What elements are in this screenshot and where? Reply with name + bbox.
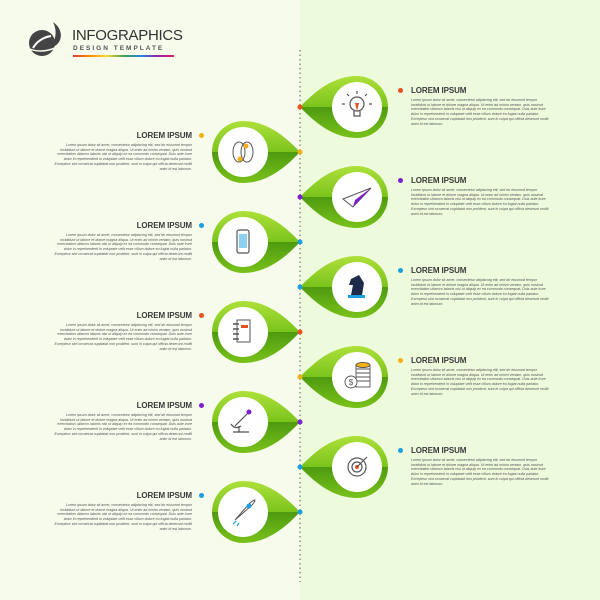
text R5: Lorem ipsum dolor sit amet, consectetur adipiscing elit, sed do eiusmod tempor incididunt ut labore et dolore magna aliqua. Ut enim ad minim veniam, quis nostrud exercitation ullamco laboris nisi ut aliquip ex ea commodo consequat. Duis aute irure dolor in reprehenderit in voluptate velit esse cillum dolore eu fugiat nulla pariatur. Excepteur sint occaecat cupidatat non proident, sunt in culpa qui officia deserunt mollit anim id est laborum. [411,458,548,486]
dot L1 [199,133,204,138]
pin R3 [298,256,388,318]
text R4 [411,356,549,396]
pin R4: $ [349,378,354,387]
text R4: LOREM IPSUM [411,356,466,365]
icon: target [348,458,366,476]
text R1: Lorem ipsum dolor sit amet, consectetur adipiscing elit, sed do eiusmod tempor incididunt ut labore et dolore magna aliqua. Ut enim ad minim veniam, quis nostrud exercitation ullamco laboris nisi ut aliquip ex ea commodo consequat. Duis aute irure dolor in reprehenderit in voluptate velit esse cillum dolore eu fugiat nulla pariatur. Excepteur sint occaecat cupidatat non proident, sunt in culpa qui officia deserunt mollit anim id est laborum. [411,98,548,126]
text L1: Lorem ipsum dolor sit amet, consectetur adipiscing elit, sed do eiusmod tempor incididunt ut labore et dolore magna aliqua. Ut enim ad minim veniam, quis nostrud exercitation ullamco laboris nisi ut aliquip ex ea commodo consequat. Duis aute irure dolor in reprehenderit in voluptate velit esse cillum dolore eu fugiat nulla pariatur. Excepteur sint occaecat cupidatat non proident, sunt in culpa qui officia deserunt mollit anim id est laborum. [55,143,192,171]
pin R5 [298,436,388,498]
icon: chess knight [349,275,364,295]
text L2 [54,221,192,261]
text R1: LOREM IPSUM [411,86,466,95]
text L4: Lorem ipsum dolor sit amet, consectetur adipiscing elit, sed do eiusmod tempor incididunt ut labore et dolore magna aliqua. Ut enim ad minim veniam, quis nostrud exercitation ullamco laboris nisi ut aliquip ex ea commodo consequat. Duis aute irure dolor in reprehenderit in voluptate velit esse cillum dolore eu fugiat nulla pariatur. Excepteur sint occaecat cupidatat non proident, sunt in culpa qui officia deserunt mollit anim id est laborum. [55,413,192,441]
icon: notebook [237,320,250,342]
dot R3 [398,268,403,273]
text R3: Lorem ipsum dolor sit amet, consectetur adipiscing elit, sed do eiusmod tempor incididunt ut labore et dolore magna aliqua. Ut enim ad minim veniam, quis nostrud exercitation ullamco laboris nisi ut aliquip ex ea commodo consequat. Duis aute irure dolor in reprehenderit in voluptate velit esse cillum dolore eu fugiat nulla pariatur. Excepteur sint occaecat cupidatat non proident, sunt in culpa qui officia deserunt mollit anim id est laborum. [411,278,548,306]
icon: microscope [231,412,249,432]
pin L1 [212,121,302,183]
icon: logo mark [29,22,61,56]
dot L3 [199,313,204,318]
icon: coins [345,362,370,388]
text L3 [54,311,192,351]
dot L5 [199,493,204,498]
text L2: Lorem ipsum dolor sit amet, consectetur adipiscing elit, sed do eiusmod tempor incididunt ut labore et dolore magna aliqua. Ut enim ad minim veniam, quis nostrud exercitation ullamco laboris nisi ut aliquip ex ea commodo consequat. Duis aute irure dolor in reprehenderit in voluptate velit esse cillum dolore eu fugiat nulla pariatur. Excepteur sint occaecat cupidatat non proident, sunt in culpa qui officia deserunt mollit anim id est laborum. [55,233,192,261]
dot L4 [199,403,204,408]
icon: bulb [342,91,372,116]
pin R1 [298,76,388,138]
logo [29,22,183,57]
text L1 [54,131,192,171]
dot R1 [398,88,403,93]
text L3: LOREM IPSUM [137,311,192,320]
dot L2 [199,223,204,228]
text R2 [411,176,549,216]
text L5 [54,491,192,531]
text L2: LOREM IPSUM [137,221,192,230]
text L4 [54,401,192,441]
logo text: INFOGRAPHICS [72,27,183,44]
icon: rocket [235,500,255,520]
pin L3 [212,301,302,363]
text R5 [411,446,549,486]
icon: brain [233,142,253,162]
text R5: LOREM IPSUM [411,446,466,455]
text R4: Lorem ipsum dolor sit amet, consectetur adipiscing elit, sed do eiusmod tempor incididunt ut labore et dolore magna aliqua. Ut enim ad minim veniam, quis nostrud exercitation ullamco laboris nisi ut aliquip ex ea commodo consequat. Duis aute irure dolor in reprehenderit in voluptate velit esse cillum dolore eu fugiat nulla pariatur. Excepteur sint occaecat cupidatat non proident, sunt in culpa qui officia deserunt mollit anim id est laborum. [411,368,548,396]
pin L4 [212,391,302,453]
text L5: LOREM IPSUM [137,491,192,500]
pin L5 [212,481,302,543]
pin L2 [212,211,302,273]
icon: phone [237,230,249,253]
text L3: Lorem ipsum dolor sit amet, consectetur adipiscing elit, sed do eiusmod tempor incididunt ut labore et dolore magna aliqua. Ut enim ad minim veniam, quis nostrud exercitation ullamco laboris nisi ut aliquip ex ea commodo consequat. Duis aute irure dolor in reprehenderit in voluptate velit esse cillum dolore eu fugiat nulla pariatur. Excepteur sint occaecat cupidatat non proident, sunt in culpa qui officia deserunt mollit anim id est laborum. [55,323,192,351]
pin R4 [298,346,388,408]
text R3 [411,266,549,306]
dot R2 [398,178,403,183]
text R2: Lorem ipsum dolor sit amet, consectetur adipiscing elit, sed do eiusmod tempor incididunt ut labore et dolore magna aliqua. Ut enim ad minim veniam, quis nostrud exercitation ullamco laboris nisi ut aliquip ex ea commodo consequat. Duis aute irure dolor in reprehenderit in voluptate velit esse cillum dolore eu fugiat nulla pariatur. Excepteur sint occaecat cupidatat non proident, sunt in culpa qui officia deserunt mollit anim id est laborum. [411,188,548,216]
icon: paper plane [343,188,371,207]
logo: DESIGN TEMPLATE [73,45,164,52]
text R3: LOREM IPSUM [411,266,466,275]
dot R5 [398,448,403,453]
text R2: LOREM IPSUM [411,176,466,185]
text L4: LOREM IPSUM [137,401,192,410]
text L1: LOREM IPSUM [137,131,192,140]
text R1 [411,86,549,126]
pin R2 [298,166,388,228]
dot R4 [398,358,403,363]
text L5: Lorem ipsum dolor sit amet, consectetur adipiscing elit, sed do eiusmod tempor incididunt ut labore et dolore magna aliqua. Ut enim ad minim veniam, quis nostrud exercitation ullamco laboris nisi ut aliquip ex ea commodo consequat. Duis aute irure dolor in reprehenderit in voluptate velit esse cillum dolore eu fugiat nulla pariatur. Excepteur sint occaecat cupidatat non proident, sunt in culpa qui officia deserunt mollit anim id est laborum. [55,503,192,531]
